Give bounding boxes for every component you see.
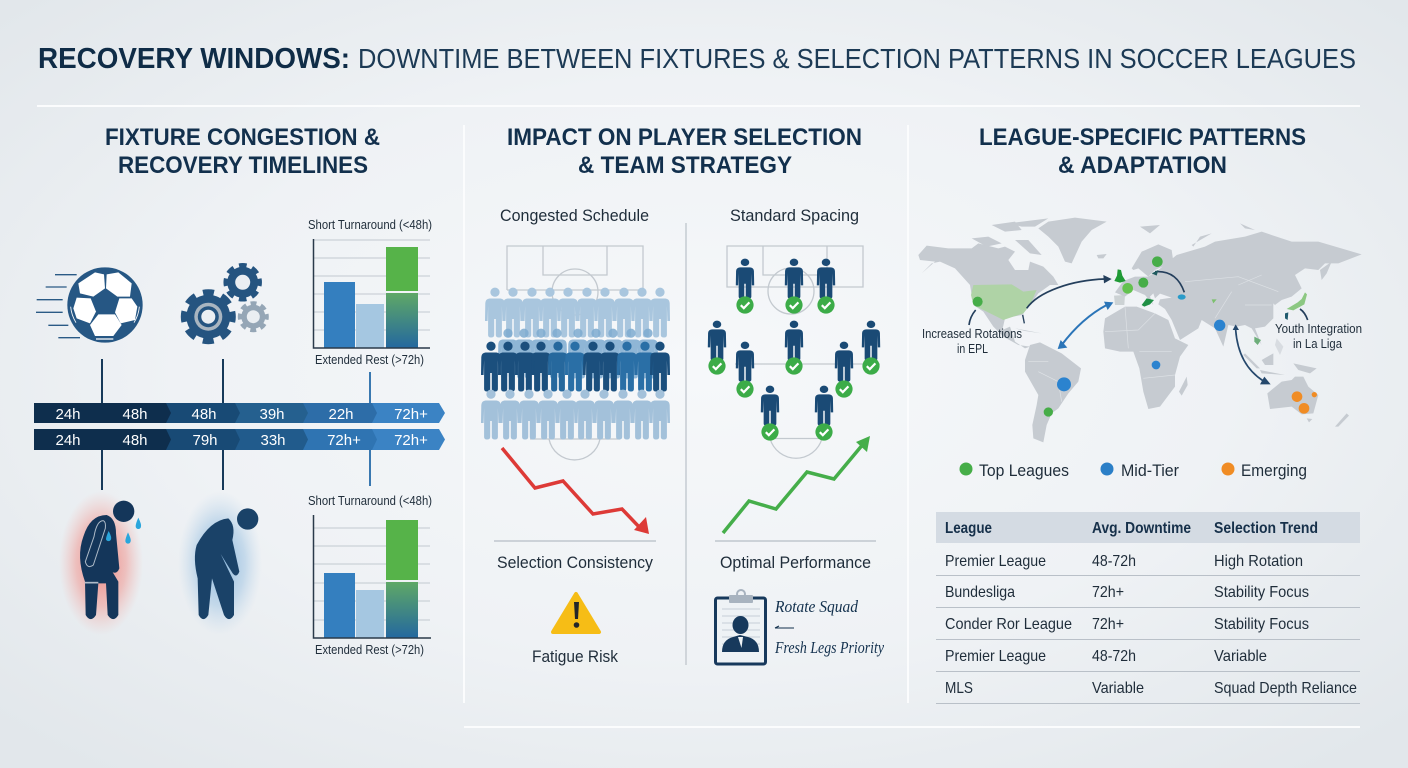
heading: fixture congestion: RECOVERY TIMELINES [118,152,368,179]
formation of players with check marks [708,259,880,441]
heading: impact on selection: & TEAM STRATEGY [578,152,792,179]
map label: increased rotations [922,327,1022,356]
map label: youth integration: Youth Integration [1275,322,1362,336]
label: fatigue risk: Fatigue Risk [532,647,618,666]
bar chart: bottom [308,494,432,657]
icon: gears [184,265,267,341]
dots: old world [1122,256,1317,414]
league table: Variable [1214,648,1267,665]
heading: league patterns: LEAGUE-SPECIFIC PATTERNS [979,124,1306,151]
map legend: Emerging [1241,461,1307,480]
timeline bar: top row: 39h [259,406,285,423]
bar chart: top: Extended Rest (>72h) [315,353,424,367]
league table: Variable [1092,680,1144,697]
timeline bar: top row: 22h [328,406,354,423]
highlighted USA [971,284,1037,320]
timeline bar: top row: 48h [122,406,148,423]
arrows: Americas to Europe [969,275,1113,349]
map: Americas and Greenland [918,218,1125,442]
panel: league-specific patterns and adaptation [918,124,1362,704]
bar chart: top: Short Turnaround (<48h) [308,218,432,232]
map legend: Top Leagues [979,461,1069,480]
league table: 48-72h [1092,648,1136,665]
timeline bar: bottom row: 72h+ [394,432,428,449]
map label: youth integration: in La Liga [1293,337,1342,351]
bar chart: bottom: Short Turnaround (<48h) [308,494,432,508]
crowd of players [481,288,670,440]
map legend: Mid-Tier [1121,461,1179,480]
label: optimal performance: Optimal Performance [720,553,871,572]
dividers [37,106,1360,727]
pitch lines: congested [507,246,643,460]
map label: increased rotations: Increased Rotations [922,327,1022,341]
heading: impact on selection [507,124,862,179]
icon: clipboard with player [716,590,766,664]
league table: MLS [945,680,973,697]
chart: rising performance arrow [723,436,870,533]
timeline bar: bottom row [34,429,445,450]
league table: Avg. Downtime [1092,520,1191,537]
column: standard spacing [708,206,884,664]
league table: Stability Focus [1214,584,1309,601]
figure: fatigued player with red glow [59,491,143,635]
timeline bar: bottom row: 48h [122,432,148,449]
highlighted regions [1114,269,1307,345]
bar chart: bottom: Extended Rest (>72h) [315,643,424,657]
pitch lines: standard [727,246,880,458]
map label: youth integration [1275,322,1362,351]
handwritten note: rotate squad [774,597,884,657]
map label: increased rotations: in EPL [957,342,988,356]
league table [936,512,1360,704]
timeline bar: bottom row: 24h [55,432,81,449]
bar chart: top [308,218,432,367]
label: standard spacing: Standard Spacing [730,206,859,225]
league table: League [945,520,992,537]
handwritten note: rotate squad: Fresh Legs Priority [774,638,884,657]
panel: impact on player selection and team strategy [481,124,884,666]
handwritten note: rotate squad: Rotate Squad [774,597,858,616]
league table: Squad Depth Reliance [1214,680,1357,697]
map legend [960,461,1307,480]
timeline bar: bottom row: 79h [192,432,218,449]
league table: 48-72h [1092,553,1136,570]
league table: Premier League [945,648,1046,665]
center divider [685,223,687,665]
dots: Americas [973,297,1071,417]
timeline bar: top row: 72h+ [394,406,428,423]
league table: Conder Ror League [945,616,1072,633]
arrows: old world [1152,270,1308,384]
heading: fixture congestion [105,124,380,179]
timeline bar: top row: 48h [191,406,217,423]
timeline bar: top row [34,403,445,423]
timeline bar: top row: 24h [55,406,81,423]
heading: league patterns [979,124,1306,179]
chart: declining selection consistency arrow [502,448,649,534]
league table: Stability Focus [1214,616,1309,633]
heading: league patterns: & ADAPTATION [1058,152,1227,179]
connector lines [102,359,370,490]
map: Europe, Africa, Asia and Oceania [1103,223,1362,427]
timeline bar: bottom row: 33h [260,432,286,449]
label: congested schedule: Congested Schedule [500,206,649,225]
title: RECOVERY WINDOWS: [38,43,350,75]
panel: fixture congestion and recovery timelines [34,124,445,657]
league table: 72h+ [1092,616,1124,633]
league table: High Rotation [1214,553,1303,570]
heading: impact on selection: IMPACT ON PLAYER SELECTION [507,124,862,151]
country borders [1105,275,1278,378]
league table: Bundesliga [945,584,1015,601]
figure: recovering player with blue glow [178,491,262,635]
timeline bar: bottom row: 72h+ [327,432,361,449]
heading: fixture congestion: FIXTURE CONGESTION & [105,124,380,151]
icon: warning triangle [553,594,599,632]
icon: soccer ball [36,267,143,343]
league table: Premier League [945,553,1046,570]
world map [918,218,1362,442]
league table: 72h+ [1092,584,1124,601]
league table: Selection Trend [1214,520,1318,537]
label: selection consistency: Selection Consistency [497,553,653,572]
column: congested schedule [481,206,670,666]
